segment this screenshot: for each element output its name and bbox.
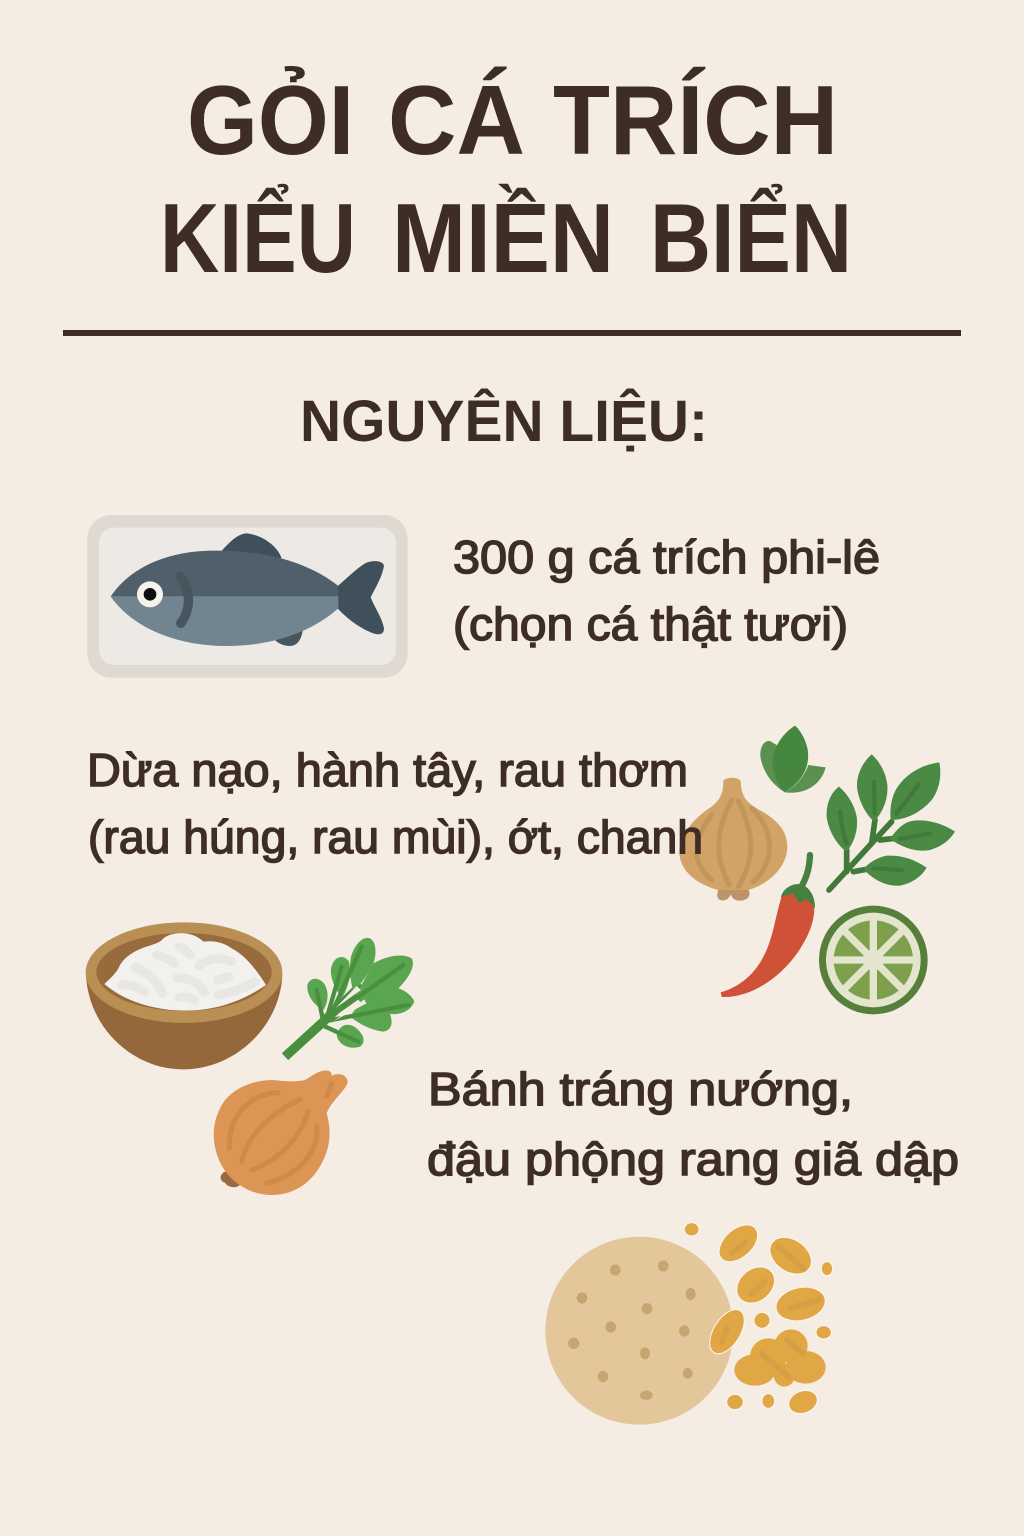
title: GỎI (187, 65, 354, 175)
icon: coconut bowl, herb and shallot (86, 922, 414, 1195)
icon: basil leaves (760, 726, 826, 793)
title: BIỂN (650, 183, 852, 293)
icon: shallot (214, 1070, 348, 1195)
icon: herb sprig (827, 754, 955, 890)
icon: lime slice (819, 906, 928, 1014)
icon: fish on tray (87, 515, 408, 678)
title: MIỀN (392, 183, 614, 293)
text: toppings: đậu phộng rang giã dập (427, 1133, 959, 1185)
icon: rice cracker and crushed peanuts (545, 1218, 833, 1425)
icon: rice cracker (545, 1237, 733, 1425)
text: fish ingredient: 300 g cá trích phi-lê (453, 531, 880, 583)
text: fish ingredient: (chọn cá thật tươi) (453, 598, 848, 650)
icon: crushed peanuts (684, 1218, 833, 1417)
peanut markings (722, 1243, 820, 1377)
title: TRÍCH (553, 65, 838, 175)
icon: red chili (721, 855, 815, 997)
text: fresh ingredients (87, 744, 703, 863)
title: KIỂU (160, 183, 356, 293)
text: toppings (427, 1063, 959, 1185)
title: CÁ (388, 65, 525, 175)
title (160, 65, 852, 293)
icon: cilantro sprig (285, 938, 414, 1057)
text: fresh ingredients: (rau húng, rau mùi), ớt, chanh (88, 811, 703, 863)
icon: onion (679, 778, 787, 901)
text: fish ingredient (453, 531, 880, 650)
icon: bowl of shredded coconut (86, 922, 282, 1069)
text: fresh ingredients: Dừa nạo, hành tây, rau thơm (87, 744, 688, 796)
text: toppings: Bánh tráng nướng, (428, 1063, 853, 1115)
icon: onion, herbs, chili and lime (679, 726, 955, 1014)
heading: ingredients: NGUYÊN LIỆU: (300, 389, 708, 454)
